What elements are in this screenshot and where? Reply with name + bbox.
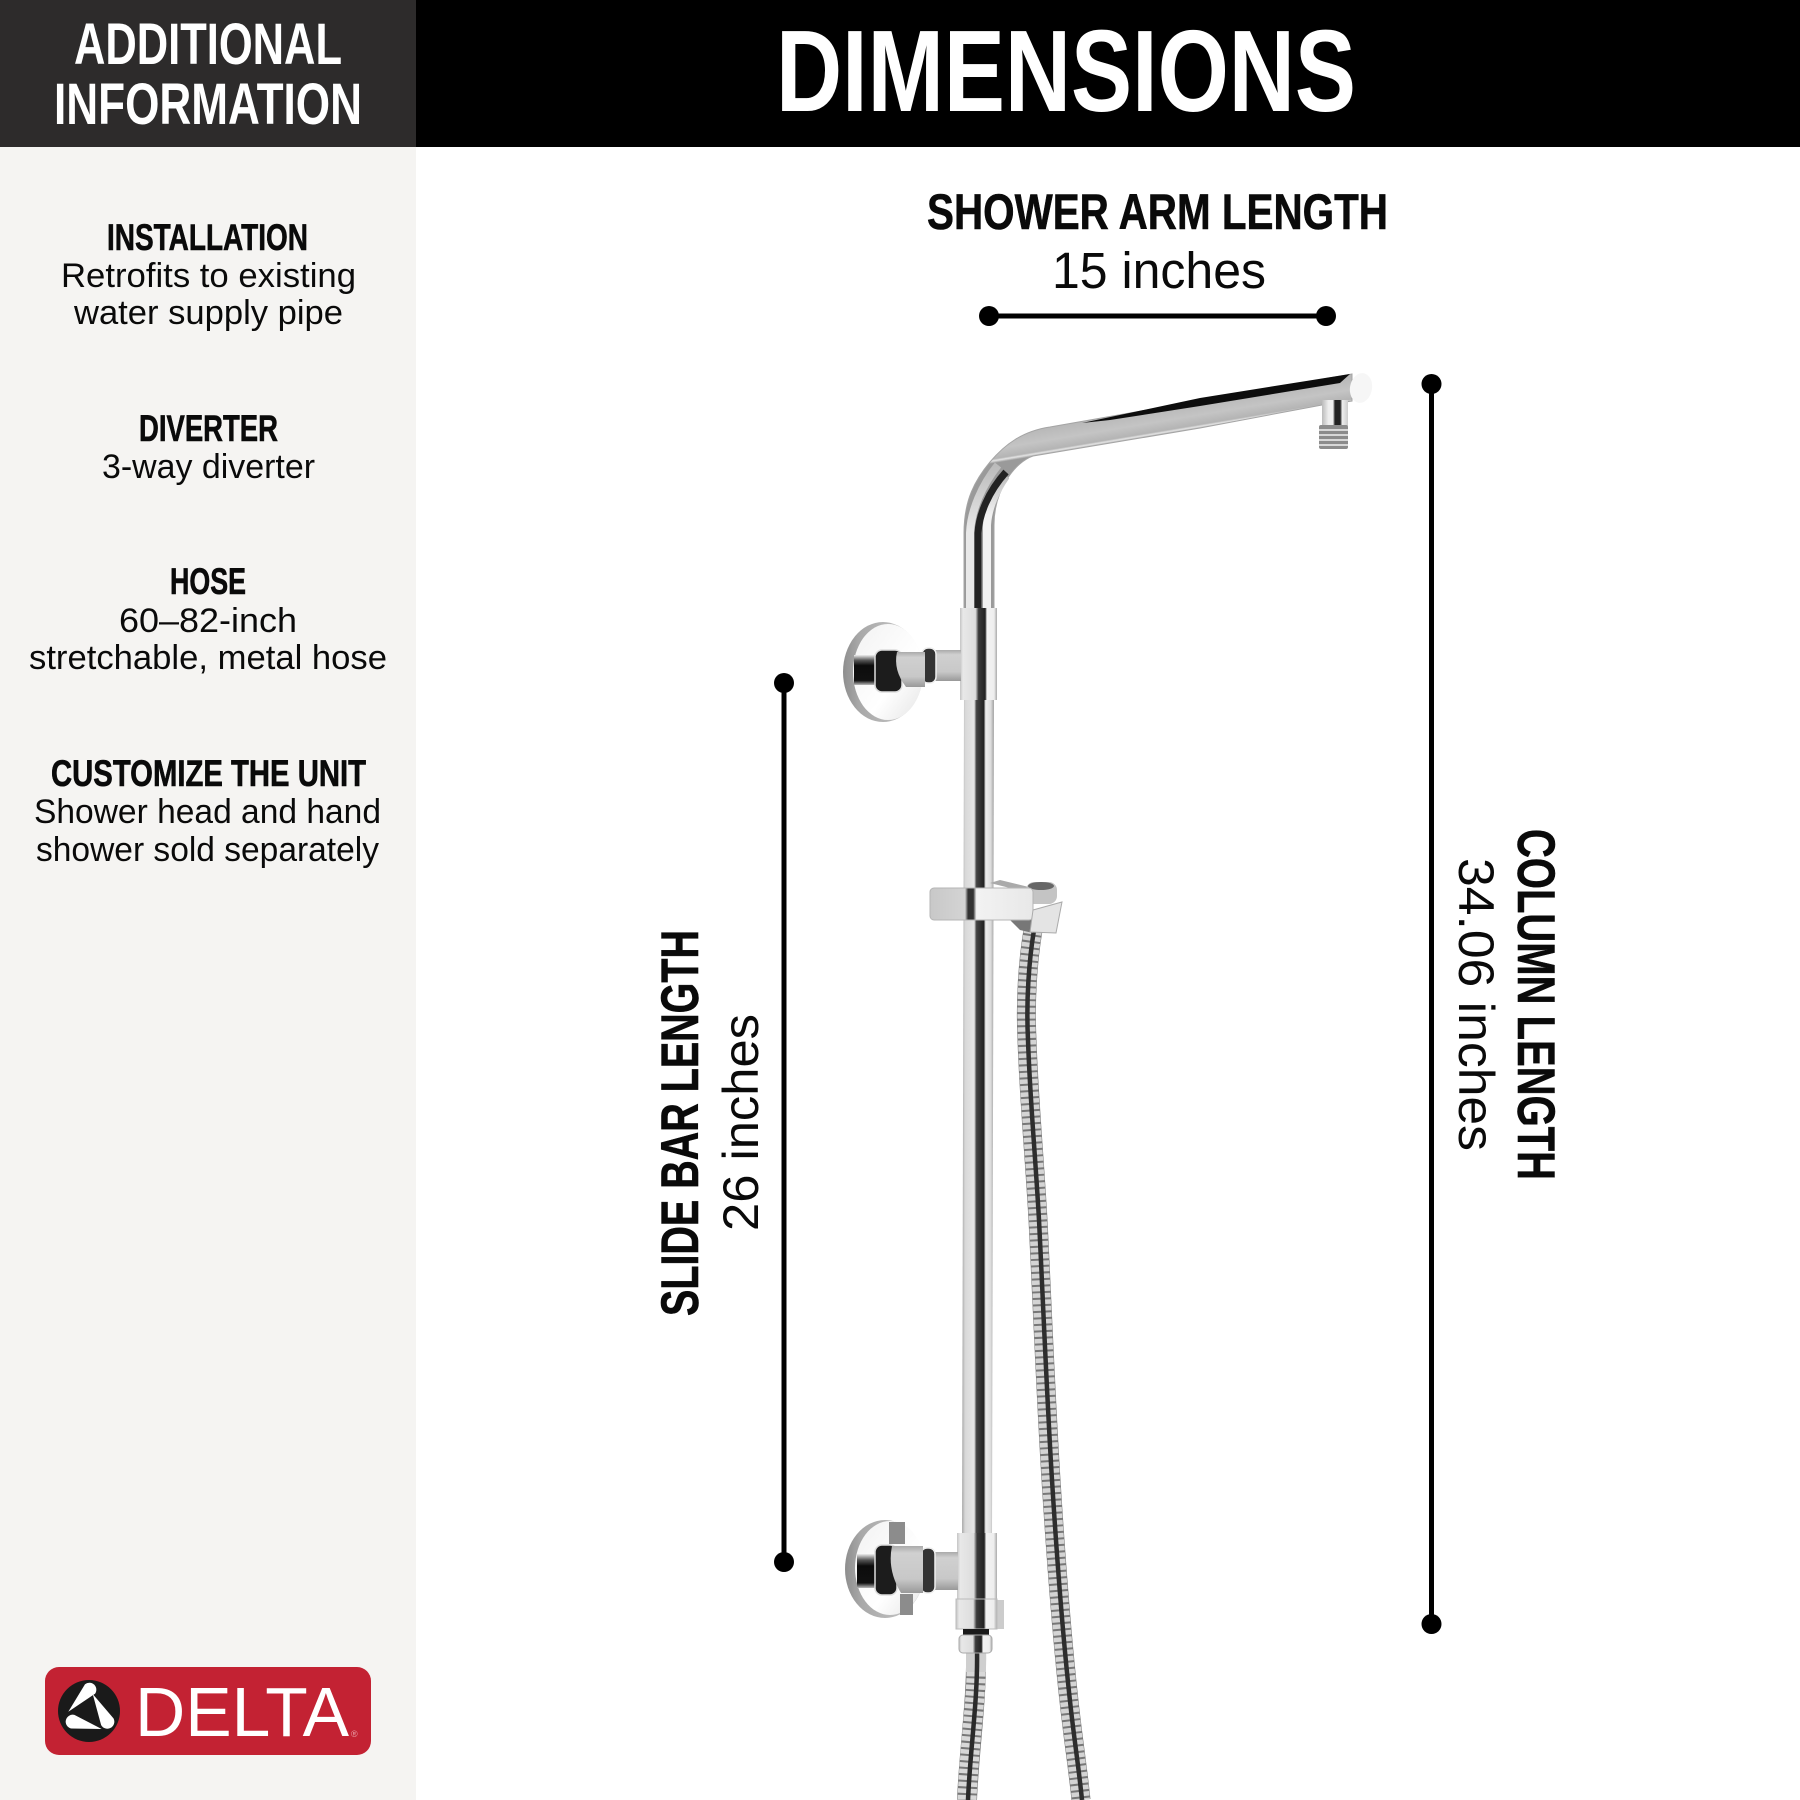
shower arm	[964, 371, 1374, 615]
info block: customize the unit	[34, 753, 381, 869]
info block: diverter	[102, 408, 315, 486]
info block: installation: INSTALLATION	[107, 217, 308, 258]
dimension: slide bar length: 26 inches	[713, 1014, 769, 1231]
header: additional information: ADDITIONAL	[74, 12, 342, 77]
sidebar panel background	[0, 147, 416, 1800]
logo: Delta: DELTA	[135, 1673, 349, 1751]
slide bar pole	[962, 690, 994, 1540]
info block: installation: Retrofits to existing	[61, 257, 356, 295]
arrow: horizontal measure line	[979, 306, 1336, 326]
arm end cap	[1348, 371, 1374, 405]
info block: hose: stretchable, metal hose	[29, 639, 387, 677]
header: additional information	[0, 0, 416, 147]
info block: hose: 60–82-inch	[119, 602, 297, 640]
info block: customize the unit: shower sold separately	[36, 831, 379, 869]
lower collar	[956, 1533, 1004, 1653]
dimension: shower arm length: 15 inches	[1052, 242, 1266, 299]
arrow: vertical measure line right	[1422, 374, 1442, 1634]
upper wall bracket	[843, 622, 961, 722]
dimension: slide bar length	[651, 673, 794, 1572]
info block: hose: HOSE	[170, 561, 246, 602]
slider hose holder	[930, 880, 1062, 933]
info block: customize the unit: CUSTOMIZE THE UNIT	[51, 753, 366, 794]
hose	[967, 930, 1082, 1800]
lower wall bracket	[845, 1520, 958, 1618]
threaded nipple	[1322, 400, 1348, 426]
logo: Delta: ®	[351, 1729, 358, 1739]
header: dimensions title	[416, 0, 1800, 147]
dimension: column length: 34.06 inches	[1448, 858, 1504, 1151]
icon: Delta triangle mark	[58, 1680, 120, 1742]
arm top reflection	[1082, 374, 1350, 423]
info block: installation: water supply pipe	[73, 294, 343, 332]
arrow: vertical measure line left	[774, 673, 794, 1572]
dimension: column length	[1422, 374, 1565, 1634]
header: dimensions title: DIMENSIONS	[776, 6, 1356, 136]
info block: diverter: 3-way diverter	[102, 448, 315, 486]
info block: diverter: DIVERTER	[139, 408, 278, 449]
info block: installation	[61, 217, 356, 332]
dimension: slide bar length: SLIDE BAR LENGTH	[651, 930, 710, 1316]
header: additional information: INFORMATION	[54, 72, 362, 137]
dimension: shower arm length	[927, 184, 1388, 326]
info block: customize the unit: Shower head and hand	[34, 793, 381, 831]
dimension: shower arm length: SHOWER ARM LENGTH	[927, 184, 1388, 240]
logo: Delta	[45, 1667, 371, 1755]
dimension: column length: COLUMN LENGTH	[1506, 829, 1565, 1180]
upper collar	[960, 608, 997, 700]
info block: hose	[29, 561, 387, 677]
product: shower column	[843, 371, 1374, 1800]
